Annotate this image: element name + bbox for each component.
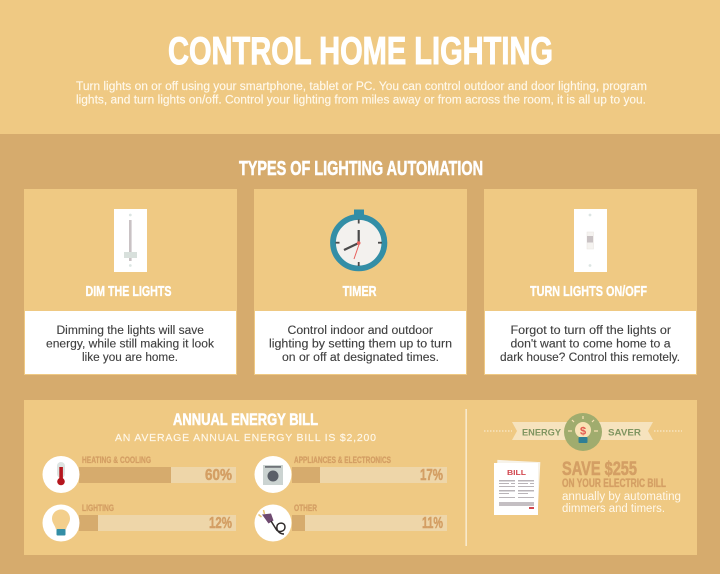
bar: other: 11% xyxy=(422,515,443,532)
card text: dark house? Control this remotely. xyxy=(500,352,680,364)
bar: lighting: LIGHTING xyxy=(82,503,114,514)
icon: light bulb xyxy=(42,504,80,542)
card heading: DIM THE LIGHTS xyxy=(86,283,172,300)
panel: timer xyxy=(254,189,467,375)
card text xyxy=(269,325,452,364)
card text: Dimming the lights will save xyxy=(56,325,204,337)
header band xyxy=(0,0,720,134)
energy saver badge: SAVER xyxy=(608,428,641,438)
panel: turn lights on/off xyxy=(484,189,697,375)
energy saver badge xyxy=(484,413,682,451)
energy bill subheading: AN AVERAGE ANNUAL ENERGY BILL IS $2,200 xyxy=(115,432,376,444)
icon: thermometer xyxy=(42,456,80,493)
card text: don't want to come home to a xyxy=(510,338,671,350)
savings callout: annually by automating xyxy=(562,491,681,503)
energy bill heading: ANNUAL ENERGY BILL xyxy=(173,410,318,429)
intro text xyxy=(76,81,647,106)
savings callout: ON YOUR ELECTRIC BILL xyxy=(562,476,666,490)
bar: other xyxy=(292,503,447,532)
panel: dim the lights xyxy=(24,189,237,375)
bar: appliances and electronics: APPLIANCES & ELECTRONICS xyxy=(294,455,391,466)
icon: dimmer switch xyxy=(114,209,147,272)
bar: heating and cooling: 60% xyxy=(205,467,232,484)
panel: annual energy bill xyxy=(24,400,697,555)
title: CONTROL HOME LIGHTING xyxy=(168,30,553,73)
card text: Control indoor and outdoor xyxy=(288,325,433,337)
bar: heating and cooling xyxy=(79,455,236,484)
card text xyxy=(500,325,680,364)
bar: other: OTHER xyxy=(294,503,317,514)
savings callout xyxy=(562,458,681,515)
card text: energy, while still making it look xyxy=(46,338,214,350)
intro text: lights, and turn lights on/off. Control your lighting from miles away or from across the room, it is all up to you. xyxy=(76,94,646,106)
icon: timer xyxy=(333,210,384,268)
section heading: TYPES OF LIGHTING AUTOMATION xyxy=(239,157,483,180)
icon: bill xyxy=(494,460,540,515)
bar: appliances and electronics xyxy=(292,455,447,484)
energy saver badge: ENERGY xyxy=(522,428,562,438)
icon: plug xyxy=(254,504,292,542)
card text: on or off at designated times. xyxy=(282,352,439,364)
icon: toggle switch xyxy=(574,209,607,272)
card text xyxy=(46,325,214,364)
savings callout: dimmers and timers. xyxy=(562,503,665,515)
icon: washing machine xyxy=(254,456,292,493)
card text: like you are home. xyxy=(82,352,178,364)
energy saver badge: $ xyxy=(580,426,586,438)
card heading: TURN LIGHTS ON/OFF xyxy=(530,283,647,300)
bar: lighting xyxy=(79,503,236,532)
bar: lighting: 12% xyxy=(209,515,232,532)
card text: lighting by setting them up to turn xyxy=(269,338,452,350)
bar: heating and cooling: HEATING & COOLING xyxy=(82,455,151,466)
bar: appliances and electronics: 17% xyxy=(420,467,443,484)
savings callout: SAVE $255 xyxy=(562,458,637,480)
card text: Forgot to turn off the lights or xyxy=(510,325,671,337)
card heading: TIMER xyxy=(342,283,377,300)
icon: bill: BILL xyxy=(507,468,526,477)
intro text: Turn lights on or off using your smartphone, tablet or PC. You can control outdoor and door lighting, program xyxy=(76,81,647,93)
